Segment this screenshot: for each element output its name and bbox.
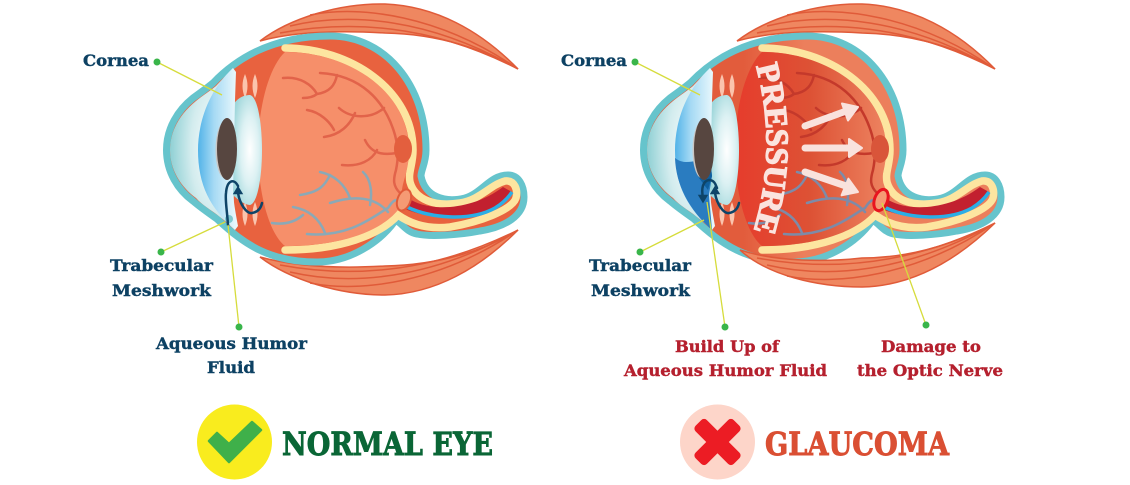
- anterior chamber: [198, 68, 238, 230]
- blue-grey blood vessels: [749, 172, 878, 234]
- panel: normal eye diagram: [166, 4, 524, 295]
- red blood vessels: [283, 73, 400, 193]
- damaged optic disc: [871, 187, 891, 213]
- label: damage to the optic nerve: Damage to: [881, 337, 981, 356]
- lens: [710, 95, 739, 205]
- fluid build-up: [675, 158, 712, 230]
- iris and pupil: [692, 118, 714, 180]
- eyeball outer shell: [166, 36, 524, 262]
- red blood vessels: [760, 73, 877, 193]
- trabecular meshwork spot: [225, 215, 233, 223]
- label: aqueous humor fluid (normal): Aqueous Humor: [155, 334, 308, 353]
- extraocular muscle, top: [737, 4, 995, 69]
- optic nerve vessels: [405, 187, 512, 217]
- macula spot: [394, 135, 412, 163]
- label: aqueous humor fluid (normal): [155, 334, 308, 377]
- label: damage to the optic nerve: [857, 337, 1003, 380]
- extraocular muscle, bottom: [260, 230, 518, 295]
- optic nerve vessels: [882, 187, 989, 217]
- label: trabecular meshwork (glaucoma): Meshwork: [591, 281, 690, 300]
- label: cornea (normal): Cornea: [83, 51, 149, 70]
- lens: [233, 95, 262, 205]
- label: damage to the optic nerve: the Optic Nerve: [857, 361, 1003, 380]
- pressure arrows: [805, 104, 862, 195]
- label: trabecular meshwork (normal): Trabecular: [110, 256, 214, 275]
- vitreous interior: [258, 52, 409, 246]
- ciliary highlights: [720, 74, 734, 226]
- blue-grey blood vessels: [272, 172, 401, 234]
- aqueous flow arrow: [226, 181, 262, 225]
- label: trabecular meshwork (glaucoma): Trabecular: [589, 256, 692, 275]
- extraocular muscle, bottom: [740, 223, 995, 287]
- label: cornea (glaucoma): Cornea: [561, 51, 627, 70]
- extraocular muscle, top: [260, 4, 518, 69]
- label: aqueous humor fluid (normal): Fluid: [207, 358, 255, 377]
- label: trabecular meshwork (normal): [110, 256, 214, 300]
- cornea bulge: [647, 68, 711, 228]
- anterior chamber: [675, 68, 715, 230]
- macula spot: [871, 135, 889, 163]
- eyeball outer shell: [644, 36, 1001, 262]
- pressurised vitreous interior: [735, 52, 886, 246]
- leader lines and dots: [154, 58, 930, 330]
- label: build up of aqueous humor fluid: Build Up of: [675, 337, 780, 356]
- heading: normal eye: NORMAL EYE: [282, 426, 493, 463]
- iris and pupil: [216, 118, 237, 180]
- aqueous flow arrows: [700, 180, 739, 213]
- cornea bulge: [170, 68, 234, 228]
- retina band: [285, 48, 517, 250]
- ciliary highlights: [242, 74, 258, 226]
- icon: cross badge: [680, 404, 755, 480]
- label: trabecular meshwork (normal): Meshwork: [112, 281, 211, 300]
- label: trabecular meshwork (glaucoma): [589, 256, 692, 300]
- heading: glaucoma: GLAUCOMA: [765, 426, 949, 463]
- optic disc: [394, 187, 414, 213]
- panel: glaucoma eye diagram: [640, 3, 1004, 288]
- retina band: [762, 48, 994, 250]
- label: build up of aqueous humor fluid: Aqueous Humor Fluid: [623, 361, 827, 380]
- label: build up of aqueous humor fluid: [623, 337, 827, 380]
- pressure word: PRESSURE: [753, 60, 788, 234]
- icon: check mark badge: [197, 404, 272, 480]
